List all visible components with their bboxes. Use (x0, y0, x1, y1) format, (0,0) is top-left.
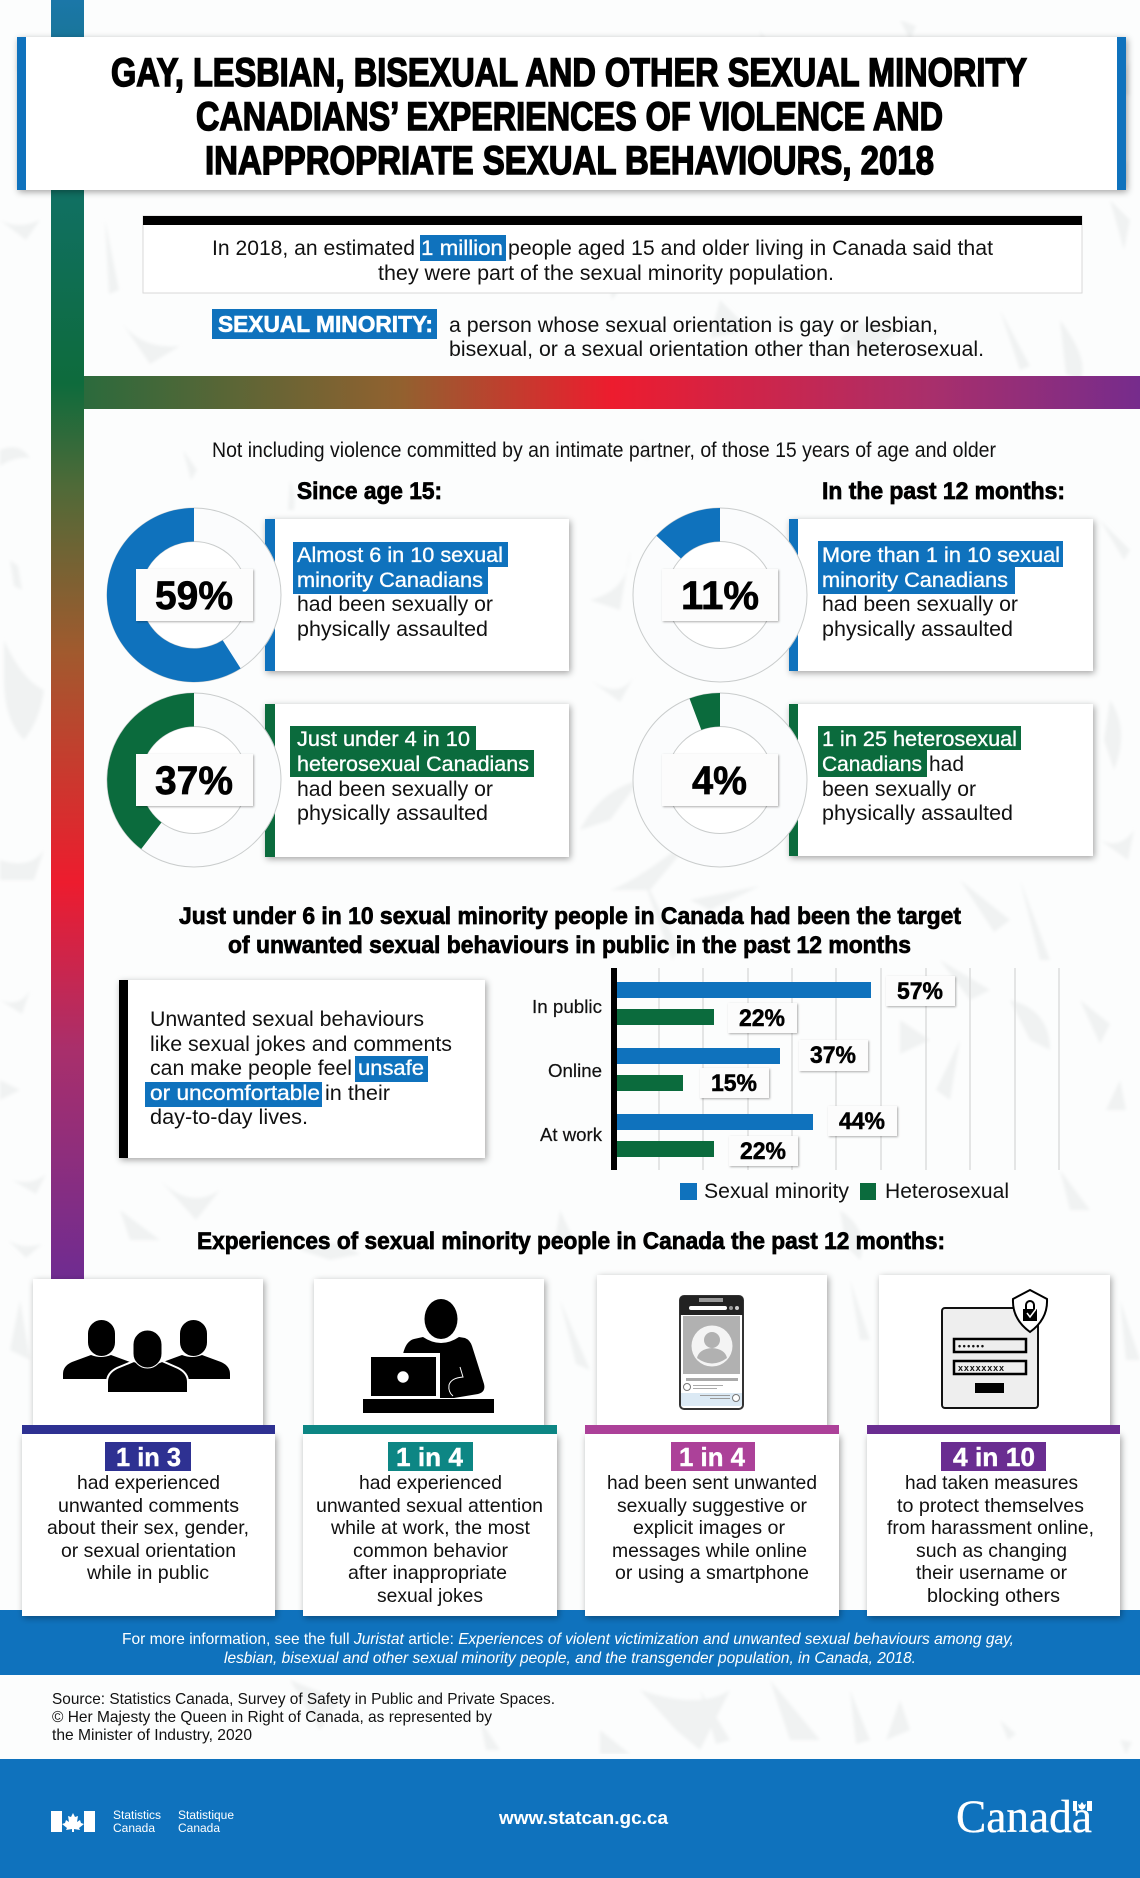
source text: Source: Statistics Canada, Survey of Safety in Public and Private Spaces. (52, 1691, 555, 1708)
card: more than 1 in 10: More than 1 in 10 sexual (822, 543, 1060, 567)
definition: sexual minority (212, 309, 984, 361)
bar chart: At work (540, 1124, 603, 1145)
panel: 1 in 3: about their sex, gender, (47, 1517, 249, 1539)
icon: three people (63, 1320, 230, 1393)
icon: password form with shield: •••••• (958, 1341, 984, 1351)
panel: 1 in 4 at work: after inappropriate (348, 1562, 507, 1584)
chart legend: Sexual minority (704, 1179, 849, 1203)
heading: unwanted behaviours: Just under 6 in 10 sexual minority people in Canada had been the target (179, 903, 961, 930)
logo: Statistics Canada: Canada (113, 1821, 155, 1835)
card: just under 4 in 10: heterosexual Canadians (297, 752, 529, 776)
heading: experiences: Experiences of sexual minority people in Canada the past 12 months: (197, 1228, 945, 1255)
bar chart: 22% (739, 1005, 785, 1032)
panel: 1 in 4 online: sexually suggestive or (617, 1495, 808, 1517)
bar chart: 44% (839, 1108, 885, 1135)
source text: © Her Majesty the Queen in Right of Canada, as represented by (52, 1709, 492, 1726)
card: 1 in 25 (789, 704, 1093, 856)
donut: 37% (107, 693, 281, 867)
donut: 11% (633, 508, 807, 682)
donut: 59%: 59% (155, 574, 233, 618)
panel: 4 in 10: to protect themselves (897, 1495, 1084, 1517)
scope note: Not including violence committed by an intimate partner, of those 15 years of age and older (212, 438, 996, 462)
panel: 1 in 4 at work (303, 1279, 557, 1616)
card: 1 in 25: been sexually or (822, 777, 976, 801)
panel: 4 in 10: 4 in 10 (953, 1442, 1035, 1472)
donut: 4% (633, 693, 807, 867)
bar chart: 37% (810, 1042, 856, 1069)
intro panel: they were part of the sexual minority population. (378, 261, 834, 285)
intro panel (143, 216, 1082, 293)
panel: 4 in 10: blocking others (927, 1585, 1060, 1607)
heading: unwanted behaviours: of unwanted sexual behaviours in public in the past 12 months (228, 932, 911, 959)
callout: unwanted sexual behaviours: in their (325, 1081, 390, 1105)
panel: 4 in 10: such as changing (916, 1540, 1067, 1562)
card: almost 6 in 10: physically assaulted (297, 617, 488, 641)
chart legend (680, 1179, 1009, 1203)
donut: 11%: 11% (681, 574, 759, 618)
card: 1 in 25: had (929, 752, 964, 776)
gradient horizontal bar (84, 376, 1140, 409)
card: almost 6 in 10 (265, 519, 569, 671)
panel: 1 in 4 online: or using a smartphone (615, 1562, 809, 1584)
bar chart: In public (532, 996, 602, 1017)
bar chart: Online (548, 1060, 602, 1081)
panel: 1 in 4 online: messages while online (612, 1540, 807, 1562)
intro panel: In 2018, an estimated (212, 236, 415, 260)
panel: 1 in 4 at work: had experienced (359, 1472, 502, 1494)
bar chart: 15% (711, 1070, 757, 1097)
more information note: lesbian, bisexual and other sexual minority people, and the transgender population, in Canada, 2018. (224, 1650, 916, 1667)
callout: unwanted sexual behaviours: like sexual jokes and comments (150, 1032, 452, 1056)
callout: unwanted sexual behaviours: day-to-day lives. (150, 1105, 308, 1129)
card: almost 6 in 10: minority Canadians (297, 568, 483, 592)
panel: 1 in 3: unwanted comments (58, 1495, 239, 1517)
title panel: CANADIANS’ EXPERIENCES OF VIOLENCE AND (196, 95, 943, 139)
logo: Statistics Canada: Canada (178, 1821, 220, 1835)
bar chart: 57% (897, 978, 943, 1005)
logo: Statistics Canada: Statistique (178, 1808, 234, 1822)
website: www.statcan.gc.ca (498, 1808, 668, 1829)
source text (52, 1691, 555, 1744)
panel: 1 in 4 online: had been sent unwanted (607, 1472, 817, 1494)
callout: unwanted sexual behaviours: or uncomfortable (150, 1081, 320, 1105)
panel: 1 in 3: 1 in 3 (116, 1442, 181, 1472)
definition: sexual minority: bisexual, or a sexual orientation other than heterosexual. (449, 337, 984, 361)
panel: 4 in 10: from harassment online, (887, 1517, 1094, 1539)
heading: since age 15: Since age 15: (297, 478, 442, 505)
panel: 1 in 4 at work: common behavior (353, 1540, 509, 1562)
logo: Statistics Canada (51, 1808, 234, 1835)
bar chart (532, 968, 1059, 1170)
chart legend: Heterosexual (885, 1179, 1009, 1203)
more information note (122, 1631, 1014, 1667)
card: just under 4 in 10 (265, 704, 569, 857)
card: just under 4 in 10: had been sexually or (297, 777, 493, 801)
card: more than 1 in 10: minority Canadians (822, 568, 1008, 592)
title panel (17, 37, 1126, 190)
panel: 1 in 4 online: explicit images or (633, 1517, 786, 1539)
panel: 1 in 4 online (585, 1275, 839, 1616)
card: almost 6 in 10: Almost 6 in 10 sexual (297, 543, 503, 567)
panel: 1 in 3: had experienced (77, 1472, 220, 1494)
card: 1 in 25: Canadians (822, 752, 922, 776)
donut: 4%: 4% (692, 759, 747, 803)
bar chart: 22% (740, 1138, 786, 1165)
panel: 1 in 4 online: 1 in 4 (679, 1442, 746, 1472)
icon: person at laptop (363, 1299, 494, 1413)
intro panel: 1 million (421, 236, 503, 260)
definition: sexual minority: a person whose sexual orientation is gay or lesbian, (449, 313, 938, 337)
heading: past 12 months: In the past 12 months: (822, 478, 1065, 505)
icon: password form with shield (942, 1290, 1047, 1408)
source text: the Minister of Industry, 2020 (52, 1727, 252, 1744)
donut: 37%: 37% (155, 759, 233, 803)
card: just under 4 in 10: Just under 4 in 10 (297, 727, 470, 751)
panel: 1 in 3: while in public (86, 1562, 209, 1584)
panel: 1 in 4 at work: unwanted sexual attention (316, 1495, 543, 1517)
panel: 4 in 10 (867, 1275, 1120, 1616)
blue information band (0, 1610, 1140, 1675)
panel: 4 in 10: their username or (916, 1562, 1068, 1584)
panel: 1 in 4 at work: while at work, the most (330, 1517, 531, 1539)
gradient vertical bar (51, 0, 84, 1279)
intro panel: people aged 15 and older living in Canada said that (508, 236, 993, 260)
card: 1 in 25: physically assaulted (822, 801, 1013, 825)
title panel: INAPPROPRIATE SEXUAL BEHAVIOURS, 2018 (205, 139, 934, 183)
callout: unwanted sexual behaviours: Unwanted sexual behaviours (150, 1007, 424, 1031)
icon: smartphone (680, 1296, 743, 1409)
panel: 4 in 10: had taken measures (905, 1472, 1078, 1494)
donut: 59% (107, 508, 281, 682)
panel: 1 in 4 at work: 1 in 4 (396, 1442, 464, 1472)
card: almost 6 in 10: had been sexually or (297, 592, 493, 616)
panel: 1 in 3: or sexual orientation (61, 1540, 236, 1562)
card: more than 1 in 10: had been sexually or (822, 592, 1018, 616)
more information note: For more information, see the full Juristat article: Experiences of violent victimization and unwanted sexual behaviours among gay, (122, 1631, 1014, 1648)
definition: sexual minority: SEXUAL MINORITY: (218, 311, 433, 337)
card: more than 1 in 10: physically assaulted (822, 617, 1013, 641)
panel: 1 in 4 at work: sexual jokes (377, 1585, 483, 1607)
panel: 1 in 3 (22, 1279, 275, 1616)
logo: Canada wordmark: Canada (956, 1791, 1092, 1843)
heading: unwanted behaviours (179, 903, 961, 959)
footer band (0, 1759, 1140, 1878)
callout: unwanted sexual behaviours: unsafe (358, 1056, 424, 1080)
callout: unwanted sexual behaviours: can make people feel (150, 1056, 352, 1080)
icon: password form with shield: xxxxxxxx (958, 1363, 1004, 1373)
callout: unwanted sexual behaviours (119, 980, 485, 1158)
card: just under 4 in 10: physically assaulted (297, 801, 488, 825)
card: 1 in 25: 1 in 25 heterosexual (822, 727, 1017, 751)
logo: Statistics Canada: Statistics (113, 1808, 161, 1822)
card: more than 1 in 10 (789, 519, 1093, 671)
